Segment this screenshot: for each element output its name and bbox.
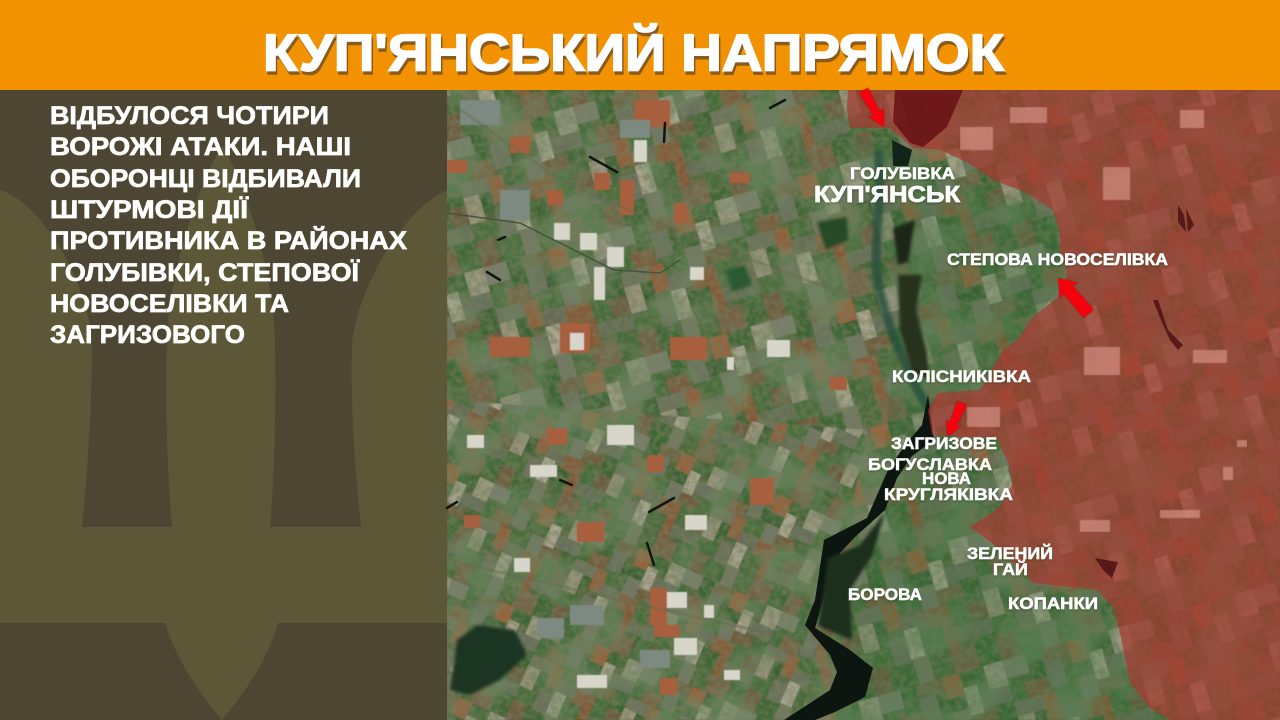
- map labels: БОГУСЛАВКА: [868, 456, 992, 474]
- panel: text sidebar: [0, 90, 447, 720]
- western forests: [817, 217, 848, 250]
- green belt east of river: [830, 130, 1170, 720]
- dark red burned area: [893, 90, 963, 147]
- map labels: ЗЕЛЕНИЙ: [967, 544, 1053, 563]
- pale fields in occupied area: [960, 107, 1247, 532]
- gullies and roads: [447, 100, 860, 640]
- panel: satellite map: [447, 90, 1280, 720]
- map labels: ГОЛУБІВКА: [850, 165, 955, 183]
- title bar: [0, 0, 1280, 90]
- lower-left forest: [450, 625, 527, 695]
- map labels: ГАЙ: [993, 560, 1028, 579]
- text block: summary: ВІДБУЛОСЯ ЧОТИРИ: [50, 102, 329, 130]
- text block: summary: ПРОТИВНИКА В РАЙОНАХ: [50, 225, 407, 255]
- trident emblem: [0, 145, 447, 720]
- river and forests: [784, 140, 934, 720]
- text block: summary: [50, 102, 407, 349]
- text block: summary: ЗАГРИЗОВОГО: [50, 321, 245, 349]
- text block: summary: ОБОРОНЦІ ВІДБИВАЛИ: [50, 165, 361, 193]
- arrow: toward Zahryzove: [941, 400, 969, 439]
- arrow: toward Stepova Novoselivka: [1049, 270, 1098, 321]
- map labels: КОПАНКИ: [1008, 595, 1098, 613]
- map labels: ЗАГРИЗОВЕ: [891, 435, 997, 453]
- text block: summary: ШТУРМОВІ ДІЇ: [50, 196, 249, 224]
- dark water patches in occupied area: [1095, 205, 1194, 578]
- arrow: toward Holubivka: [856, 86, 892, 131]
- map labels: КУП'ЯНСЬК: [814, 181, 961, 207]
- map labels: КРУГЛЯКІВКА: [884, 486, 1013, 504]
- map labels: [814, 165, 1168, 613]
- map labels: НОВА: [922, 470, 971, 488]
- title: КУП'ЯНСЬКИЙ НАПРЯМОК: [263, 24, 1004, 82]
- map labels: КОЛІСНИКІВКА: [892, 368, 1031, 386]
- text block: summary: ГОЛУБІВКИ, СТЕПОВОЇ: [50, 259, 360, 287]
- occupied territory overlay: [847, 90, 1280, 720]
- text block: summary: ВОРОЖІ АТАКИ. НАШІ: [50, 133, 351, 161]
- text block: summary: НОВОСЕЛІВКИ ТА: [50, 290, 289, 318]
- map labels: СТЕПОВА НОВОСЕЛІВКА: [947, 251, 1168, 269]
- olive tint over the fields: [447, 90, 1280, 720]
- map labels: БОРОВА: [848, 586, 922, 604]
- hand-placed fields: [447, 100, 847, 695]
